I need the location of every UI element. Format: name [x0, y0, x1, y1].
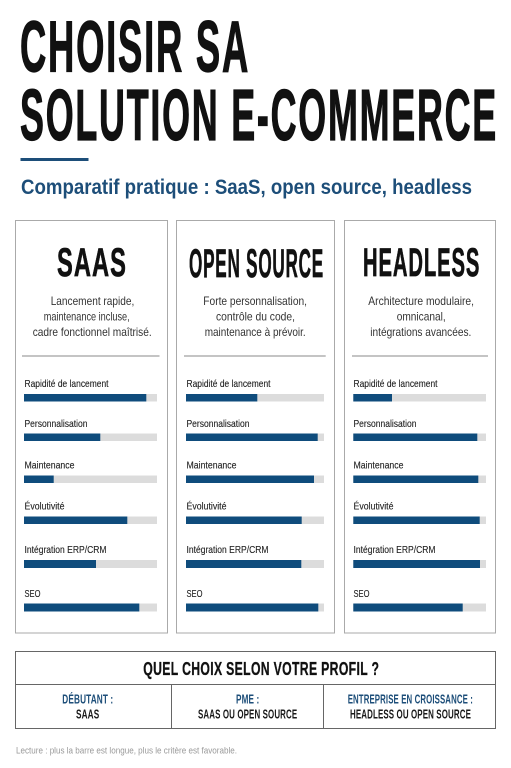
criterion: Rapidité de lancement: Rapidité de lancement [24, 378, 109, 390]
description: cadre fonctionnel maîtrisé. [33, 325, 152, 339]
panel border [176, 220, 334, 633]
criterion: Personnalisation [24, 418, 157, 441]
description [33, 294, 152, 339]
profile: Entreprise en croissance [348, 691, 473, 721]
description: omnicanal, [397, 310, 446, 324]
table frame [16, 652, 496, 728]
footnote: Lecture : plus la barre est longue, plus le critère est favorable. [16, 746, 237, 756]
criterion: Personnalisation [186, 418, 324, 441]
criterion: Intégration ERP/CRM: Intégration ERP/CRM [24, 544, 106, 556]
profile: Débutant [62, 691, 113, 721]
panel: Open source [176, 220, 334, 633]
description [368, 294, 474, 339]
criterion: Intégration ERP/CRM: Intégration ERP/CRM [354, 544, 436, 556]
description [203, 294, 307, 339]
criterion: Rapidité de lancement [353, 378, 486, 402]
criterion: Personnalisation: Personnalisation [24, 418, 88, 430]
title [20, 8, 498, 156]
criterion: SEO: SEO [354, 588, 370, 600]
criterion: Maintenance: Maintenance [24, 460, 75, 472]
criterion: Personnalisation: Personnalisation [354, 418, 417, 430]
criterion: Évolutivité [353, 500, 486, 524]
table heading: QUEL CHOIX SELON VOTRE PROFIL ? [143, 658, 379, 679]
criterion: Intégration ERP/CRM [24, 544, 157, 568]
description: Forte personnalisation, [203, 294, 307, 308]
profile: PME: SAAS OU OPEN SOURCE [198, 706, 297, 721]
panel: profile recommendations [16, 652, 496, 728]
profile: PME: PME : [236, 691, 259, 706]
criterion: SEO [24, 588, 157, 612]
profile: Débutant: SAAS [76, 706, 99, 721]
profile: Débutant: DÉBUTANT : [62, 691, 113, 706]
criterion: SEO: SEO [24, 588, 40, 600]
criterion: Personnalisation [353, 418, 486, 441]
criterion: Personnalisation: Personnalisation [186, 418, 250, 430]
criterion: Intégration ERP/CRM [353, 544, 486, 568]
accent rule [20, 158, 88, 161]
panel: SaaS [16, 220, 168, 633]
description: intégrations avancées. [370, 325, 471, 339]
criterion: Intégration ERP/CRM: Intégration ERP/CRM [186, 544, 268, 556]
criterion: Maintenance: Maintenance [354, 460, 404, 472]
criterion: Évolutivité: Évolutivité [186, 500, 227, 512]
text: OPEN SOURCE [189, 242, 324, 286]
criterion: SEO [353, 588, 486, 612]
description: Architecture modulaire, [368, 294, 474, 308]
panel border [344, 220, 496, 633]
criterion: SEO: SEO [186, 588, 202, 600]
description: Lancement rapide, [51, 294, 134, 308]
profile: PME [198, 691, 297, 721]
description: maintenance incluse, [44, 310, 130, 324]
criterion: Évolutivité: Évolutivité [354, 500, 394, 512]
criterion: Maintenance: Maintenance [186, 460, 237, 472]
panel border [16, 220, 168, 633]
criterion: SEO [186, 588, 324, 612]
criterion: Rapidité de lancement [186, 378, 324, 402]
criterion: Maintenance [24, 460, 157, 483]
criterion: Rapidité de lancement: Rapidité de lancement [354, 378, 438, 390]
panel: Headless [344, 220, 496, 633]
criterion: Rapidité de lancement: Rapidité de lancement [186, 378, 271, 390]
description: contrôle du code, [216, 310, 295, 324]
criterion: Maintenance [353, 460, 486, 483]
criterion: Évolutivité [24, 500, 157, 524]
criterion: Rapidité de lancement [24, 378, 157, 402]
criterion: Intégration ERP/CRM [186, 544, 324, 568]
criterion: Évolutivité: Évolutivité [24, 500, 65, 512]
criterion: Maintenance [186, 460, 324, 483]
criterion: Évolutivité [186, 500, 324, 524]
title: CHOISIR SA [20, 8, 250, 88]
heading: SaaS: SAAS [57, 241, 127, 285]
description: maintenance à prévoir. [205, 325, 306, 339]
